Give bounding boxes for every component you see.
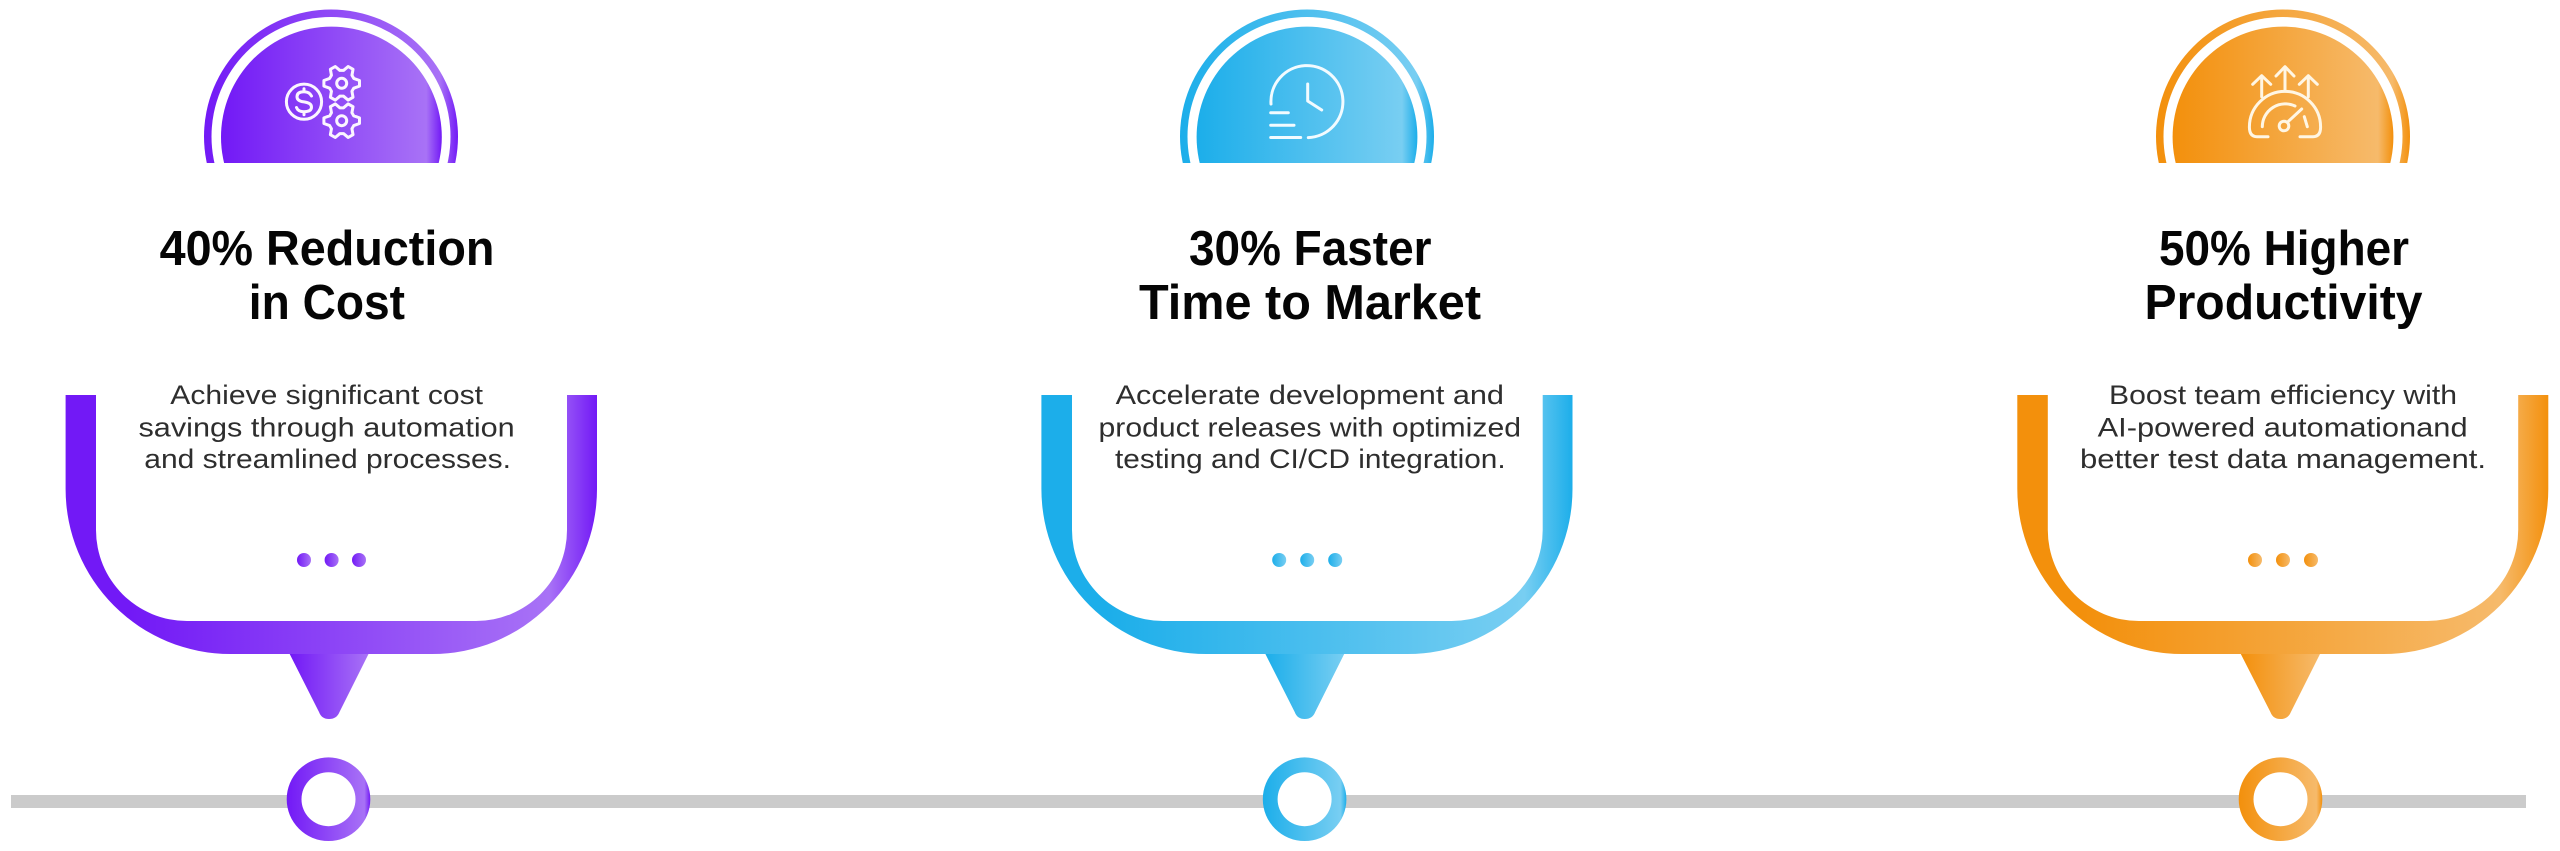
dome: orange [2156,10,2410,163]
description: Accelerate development and [1116,380,1504,410]
description: savings through automation [138,412,515,442]
icon: clock [1271,66,1343,138]
description: Boost team efficiency with [2109,380,2457,410]
heading: 50% Higher [2159,222,2409,276]
pointer [2241,654,2320,719]
timeline node [1263,757,1346,841]
heading: 40% Reduction [160,222,494,276]
three dots [297,553,366,567]
icon: dollar and gears [286,66,360,138]
panel: 30% faster time to market [1041,10,1572,841]
dome: purple [204,10,458,163]
panel: 40% reduction in cost [66,10,597,841]
description: product releases with optimized [1098,412,1521,442]
description: better test data management. [2080,444,2486,474]
panel: 50% higher productivity [2017,10,2548,841]
cup frame [1041,395,1572,654]
timeline node [2239,757,2322,841]
heading: in Cost [249,276,405,330]
dome: blue [1180,10,1434,163]
three dots [2248,553,2318,567]
heading: 30% Faster [1189,222,1432,276]
timeline node [287,757,370,841]
pointer [290,654,368,719]
cup frame [2017,395,2548,654]
timeline bar [11,795,2526,808]
cup frame [66,395,597,654]
description: AI-powered automationand [2098,412,2468,442]
heading: Productivity [2144,276,2422,330]
pointer [1265,654,1344,719]
heading: Time to Market [1139,276,1481,330]
description: testing and CI/CD integration. [1115,444,1506,474]
description: and streamlined processes. [144,444,511,474]
icon: speedometer with arrows [2249,67,2321,137]
three dots [1272,553,1342,567]
description: Achieve significant cost [170,380,484,410]
